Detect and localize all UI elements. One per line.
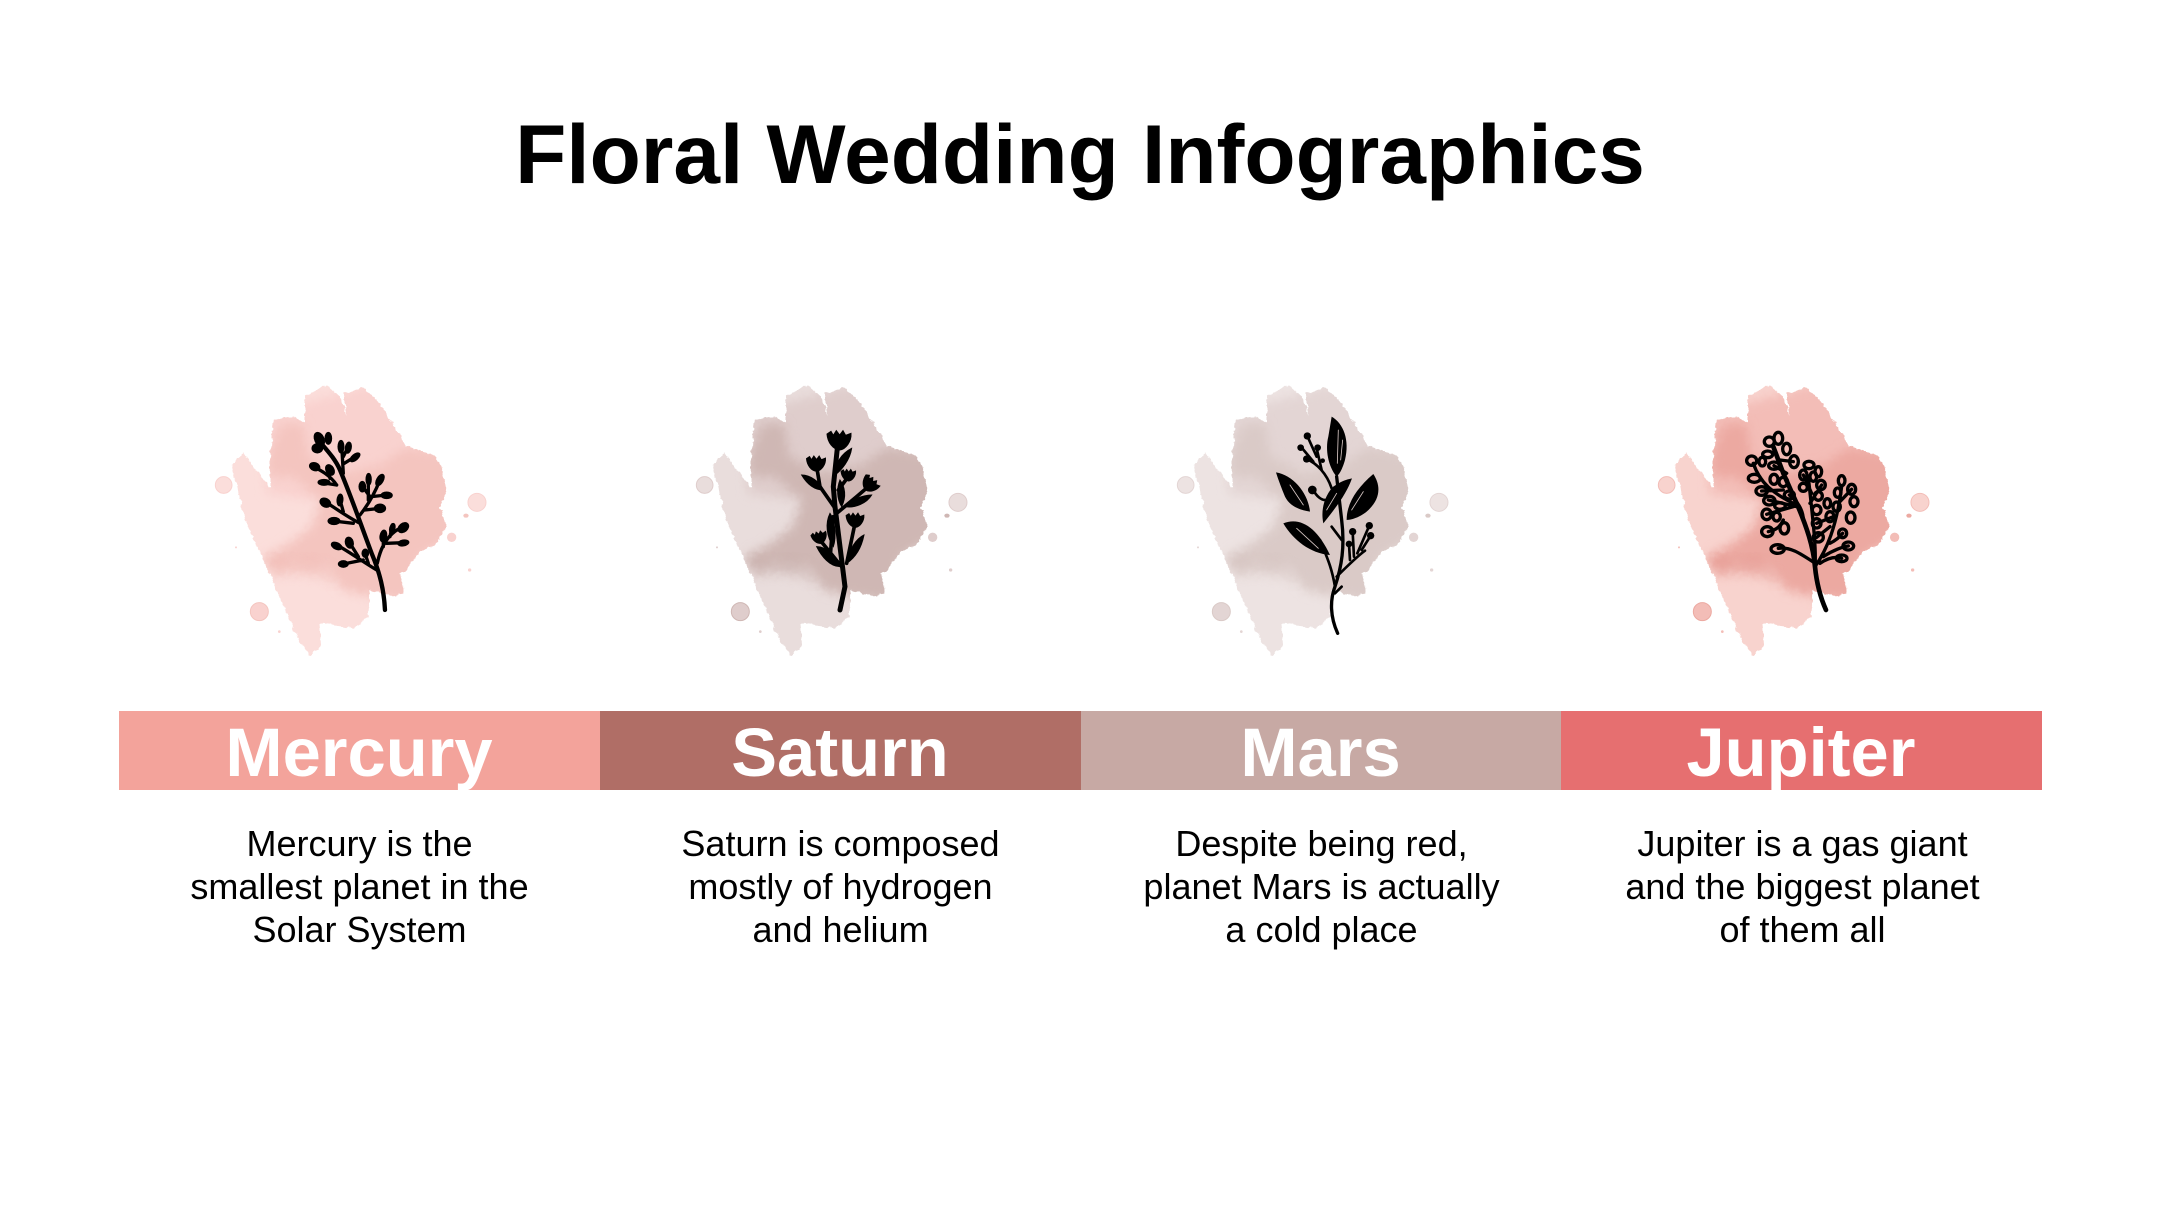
text: Saturn description: mostly of hydrogen (688, 866, 993, 907)
banner: Mercury (118, 711, 600, 790)
icon: Jupiter watercolor and branch (1656, 373, 1929, 660)
text: Jupiter description: Jupiter is a gas giant (1637, 823, 1968, 864)
icon: Mars watercolor and leaves (1175, 373, 1448, 660)
text: Mars description: a cold place (1225, 909, 1418, 950)
banner: Jupiter: Jupiter (1686, 714, 1916, 790)
leaves: Mars (1276, 417, 1378, 633)
branch: Jupiter (1747, 432, 1858, 610)
text: Mercury description (190, 823, 529, 950)
text: Mars description: planet Mars is actually (1143, 866, 1500, 907)
banner: Saturn (600, 711, 1080, 790)
flowers: Saturn (802, 431, 881, 610)
title: Floral Wedding Infographics (515, 107, 1645, 201)
icon: Mercury watercolor and sprig (213, 373, 486, 660)
banner: Mars (1080, 711, 1560, 790)
text: Mars description (1143, 823, 1500, 950)
text: Mercury description: Solar System (252, 909, 467, 950)
text: Saturn description: Saturn is composed (681, 823, 1000, 864)
watercolor splash: Mars (1175, 373, 1448, 660)
text: Jupiter description: of them all (1719, 909, 1886, 950)
text: Saturn description: and helium (752, 909, 929, 950)
text: Jupiter description (1625, 823, 1980, 950)
text: Jupiter description: and the biggest planet (1625, 866, 1980, 907)
banner: Mars: Mars (1240, 714, 1401, 790)
text: Mercury description: Mercury is the (246, 823, 473, 864)
text: Mars description: Despite being red, (1175, 823, 1468, 864)
icon: Saturn watercolor and flowers (694, 373, 967, 660)
watercolor splash: Saturn (694, 373, 967, 660)
banner: Jupiter (1560, 711, 2042, 790)
watercolor splash: Jupiter (1656, 373, 1929, 660)
banner: Saturn: Saturn (731, 714, 949, 790)
floral illustrations (214, 386, 1930, 656)
banner: Mercury: Mercury (225, 714, 493, 790)
watercolor splash: Mercury (213, 373, 486, 660)
sprig: Mercury (308, 431, 411, 610)
text: Mercury description: smallest planet in the (190, 866, 529, 907)
text: Saturn description (681, 823, 1000, 950)
